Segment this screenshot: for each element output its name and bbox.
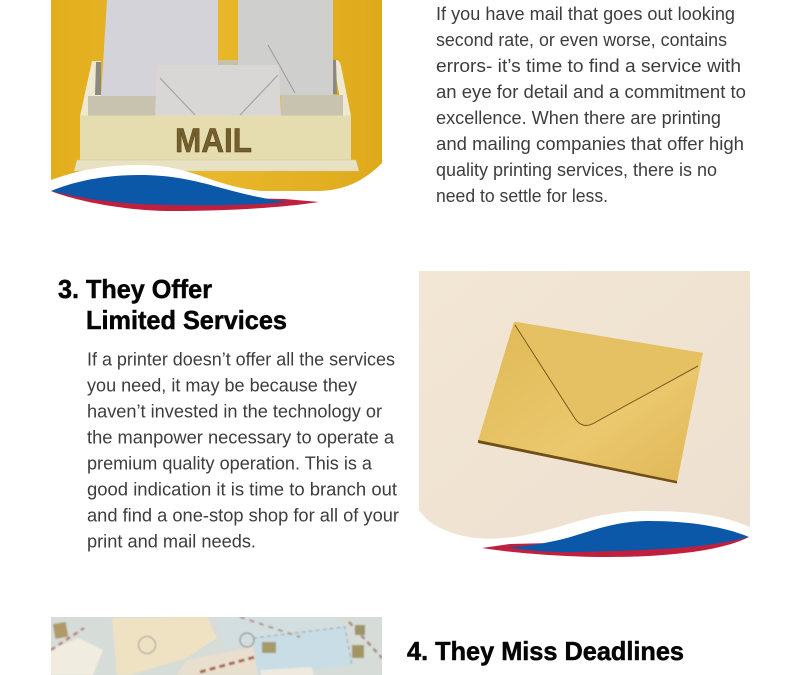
stamp on blue envelope xyxy=(262,642,276,653)
text block: section 3 body: and find a one-stop shop for all of your xyxy=(87,506,399,526)
text block: section 2 body: errors- it’s time to find a service with xyxy=(436,56,741,76)
heading: section 3: Limited Services xyxy=(86,305,287,335)
tall left envelope xyxy=(101,0,218,96)
text block: section 2 body: need to settle for less. xyxy=(436,186,608,206)
text block: section 3 body: the manpower necessary to operate a xyxy=(87,428,395,448)
box label: MAIL xyxy=(175,122,252,160)
cream envelope xyxy=(112,617,217,675)
stamp top left xyxy=(53,622,68,639)
white wave over mail box photo xyxy=(45,165,330,215)
text block: section 3 body: If a printer doesn’t offer all the services xyxy=(87,350,395,370)
text block: section 3 body: premium quality operation. This is a xyxy=(87,454,373,474)
lower beige envelope xyxy=(176,647,258,675)
photo: gold envelope on cream background xyxy=(419,271,750,539)
envelope body xyxy=(478,322,703,482)
text block: section 2 body: second rate, or even worse, contains xyxy=(436,30,727,50)
photo: airmail envelopes xyxy=(48,614,386,675)
photo: wooden mail box on yellow background xyxy=(51,0,382,191)
heading: section 4: 4. They Miss Deadlines xyxy=(407,636,684,666)
top right pale envelope xyxy=(215,614,345,650)
text block: section 2 body xyxy=(436,4,746,206)
right side stamps and stripes xyxy=(352,645,364,658)
text block: section 2 body: excellence. When there are printing xyxy=(436,108,721,128)
centre airmail stripe xyxy=(200,657,255,672)
text block: section 3 body: print and mail needs. xyxy=(87,532,256,552)
box front panel xyxy=(80,116,351,160)
ribbon: blue and red wave under envelope photo xyxy=(482,521,749,557)
text block: section 3 body: good indication it is time to branch out xyxy=(87,480,397,500)
heading: section 3: 3. They Offer xyxy=(58,274,212,304)
text block: section 2 body: and mailing companies that offer high xyxy=(436,134,744,154)
text block: section 2 body: If you have mail that goes out looking xyxy=(436,4,735,24)
text block: section 2 body: quality printing services, there is no xyxy=(436,160,717,180)
text block: section 3 body xyxy=(87,350,399,552)
text block: section 3 body: haven’t invested in the technology or xyxy=(87,402,382,422)
envelope flap xyxy=(515,322,703,425)
text block: section 2 body: an eye for detail and a commitment to xyxy=(436,82,746,102)
heading: section 3 xyxy=(58,274,287,335)
red and green airmail stripe left xyxy=(51,628,84,650)
tall right envelope xyxy=(238,0,333,95)
text block: section 3 body: you need, it may be because they xyxy=(87,376,357,396)
box back and inner walls xyxy=(80,61,101,116)
blue airmail envelope xyxy=(253,627,352,675)
lower pale paper xyxy=(260,667,314,675)
ribbon: blue and red wave under mail box photo xyxy=(51,175,319,211)
small front envelope xyxy=(155,65,281,116)
pale left envelope xyxy=(50,638,103,675)
